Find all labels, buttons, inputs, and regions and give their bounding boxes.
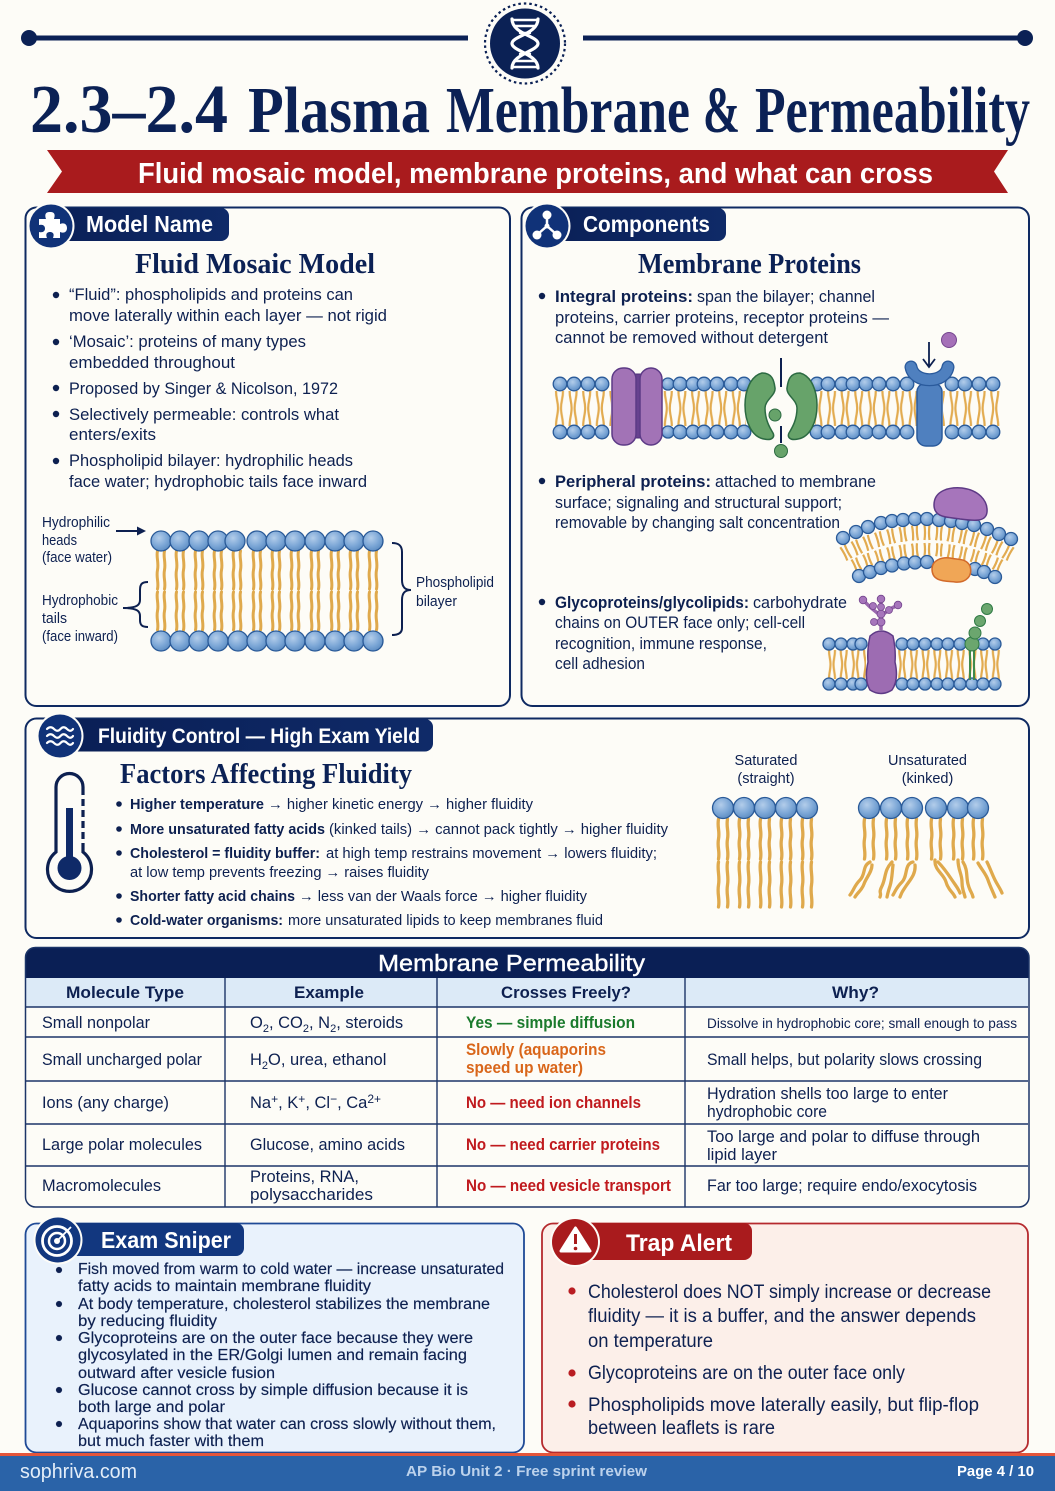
row: small uncharged polar: O, urea, ethanol [268, 1051, 386, 1069]
footer bar: AP Bio Unit 2 · Free sprint review [406, 1463, 647, 1480]
heading: Fluid Mosaic Model: Fluid Mosaic Model [135, 248, 375, 280]
row: ions: 2+ [367, 1092, 381, 1106]
panel: trap alert [542, 1217, 1028, 1452]
row: ions: , K [278, 1094, 298, 1112]
icon: warning triangle [550, 1217, 600, 1267]
bullet list: factors: at high temp restrains movement → lowers fluidity; [326, 846, 657, 862]
row: small nonpolar [42, 1014, 1017, 1035]
bullet list: trap points: fluidity — it is a buffer, and the answer depends [588, 1306, 976, 1327]
carrier protein [745, 358, 817, 458]
bullet list: factors: Cholesterol = fluidity buffer: [130, 846, 320, 862]
glycolipid [965, 604, 992, 680]
row: small nonpolar: 2 [303, 1023, 309, 1035]
bullet list: fluid mosaic facts: ‘Mosaic’: proteins of many types [69, 332, 306, 351]
label: phospholipid bilayer: Phospholipid [416, 575, 494, 591]
arrow: to heads [116, 526, 146, 536]
row: small uncharged polar: speed up water) [466, 1059, 583, 1077]
row: ions: Hydration shells too large to enter [707, 1085, 948, 1103]
row: macromolecules [42, 1168, 977, 1204]
bullet list: fluid mosaic facts: move laterally within each layer — not rigid [69, 306, 387, 325]
bullet list: fluid mosaic facts: Phospholipid bilayer: hydrophilic heads [69, 451, 353, 470]
row: ions [42, 1085, 948, 1121]
header rule with DNA emblem [21, 4, 1033, 84]
table: membrane permeability [25, 947, 1029, 1207]
text: glycoproteins and glycolipids: cell adhesion [555, 654, 645, 673]
diagram: phospholipid bilayer [42, 515, 494, 651]
row: large polar molecules: Glucose, amino acids [250, 1136, 405, 1154]
channel protein [612, 368, 662, 445]
title: Plasma [248, 74, 430, 147]
bullet list: exam sniper points: At body temperature, cholesterol stabilizes the membrane [78, 1296, 490, 1313]
table header row [26, 978, 1028, 1007]
diagram: unsaturated kinked tails: (kinked) [902, 771, 953, 787]
bullet list: factors: → higher kinetic energy → higher fluidity [268, 797, 534, 813]
icon: thermometer [48, 774, 91, 891]
peripheral protein: purple [934, 488, 987, 520]
panel: exam sniper [26, 1216, 524, 1452]
footer bar [0, 1453, 1055, 1491]
row: ions: hydrophobic core [707, 1103, 827, 1121]
tab: Trap Alert: Trap Alert [626, 1230, 732, 1257]
bullet list: exam sniper points: Glucose cannot cross by simple diffusion because it is [78, 1382, 468, 1399]
diagram: saturated tails: Saturated [735, 753, 797, 769]
row: small nonpolar: , CO [269, 1014, 303, 1032]
icon: network nodes [524, 202, 570, 250]
label: hydrophobic tails: Hydrophobic [42, 593, 118, 609]
label: hydrophobic tails: (face inward) [42, 629, 118, 645]
bullet list: fluid mosaic facts: embedded throughout [69, 353, 235, 372]
row: ions: + [298, 1092, 305, 1106]
row: small nonpolar: Dissolve in hydrophobic core; small enough to pass [707, 1015, 1017, 1031]
text: peripheral proteins: Peripheral proteins: [555, 472, 711, 491]
bullet list: fluid mosaic facts: “Fluid”: phospholipids and proteins can [69, 285, 353, 304]
label: hydrophobic tails [42, 593, 118, 645]
row: macromolecules: Far too large; require endo/exocytosis [707, 1177, 977, 1195]
row: large polar molecules: lipid layer [707, 1146, 778, 1164]
bullet list: trap points: Glycoproteins are on the outer face only [588, 1363, 905, 1384]
tab: Fluidity Control [50, 719, 433, 752]
label: hydrophilic heads: Hydrophilic [42, 515, 110, 531]
footer bar: Page 4 / 10 [957, 1463, 1034, 1480]
row: small uncharged polar: Small uncharged polar [42, 1051, 202, 1069]
table header row: Why? [832, 983, 879, 1002]
label: hydrophilic heads [42, 515, 112, 566]
text: integral proteins: span the bilayer; channel [697, 287, 875, 306]
bullet list: factors: (kinked tails) → cannot pack tightly → higher fluidity [329, 822, 669, 838]
row: small uncharged polar: Small helps, but polarity slows crossing [707, 1051, 982, 1069]
row: ions: Ions (any charge) [42, 1094, 169, 1112]
diagram: unsaturated kinked tails [850, 753, 1002, 897]
receptor protein [911, 332, 956, 446]
subtitle ribbon: Fluid mosaic model, membrane proteins, and what can cross [138, 158, 933, 190]
diagram: unsaturated kinked tails: Unsaturated [888, 753, 967, 769]
icon: DNA helix [512, 19, 538, 68]
row: small nonpolar: O [250, 1014, 263, 1032]
title: Membrane [446, 74, 690, 147]
text: glycoproteins and glycolipids: Glycoproteins/glycolipids: [555, 593, 749, 612]
row: macromolecules: No — need vesicle transport [466, 1177, 671, 1195]
text: peripheral proteins [539, 472, 876, 532]
row: small uncharged polar: Slowly (aquaporins [466, 1041, 606, 1059]
bullet list: exam sniper points: but much faster with them [78, 1433, 264, 1450]
bullet list: trap points: Phospholipids move laterally easily, but flip-flop [588, 1395, 979, 1416]
tab: Model Name: Model Name [86, 211, 213, 237]
label: hydrophobic tails: tails [42, 611, 67, 627]
bullet list: exam sniper points: Aquaporins show that water can cross slowly without them, [78, 1416, 496, 1433]
row: macromolecules: Proteins, RNA, [250, 1168, 359, 1186]
heading: Membrane Proteins: Membrane Proteins [638, 248, 861, 280]
bullet list: fluid mosaic facts: face water; hydrophobic tails face inward [69, 472, 367, 491]
bullet list: fluid mosaic facts: Proposed by Singer & Nicolson, 1972 [69, 379, 338, 398]
tab: Fluidity Control: Fluidity Control — High Exam Yield [98, 725, 420, 748]
bullet list: fluid mosaic facts: Selectively permeable: controls what [69, 405, 339, 424]
row: ions: − [330, 1092, 337, 1106]
bullet list: factors: Cold-water organisms: [130, 913, 283, 929]
label: phospholipid bilayer [416, 575, 494, 610]
bullet list: trap points [568, 1282, 991, 1439]
table title bar: Membrane Permeability [378, 950, 646, 976]
glycoprotein [859, 595, 902, 694]
bullet list: exam sniper points: Glycoproteins are on the outer face because they were [78, 1330, 473, 1347]
row: macromolecules: polysaccharides [250, 1186, 373, 1204]
peripheral protein: orange [932, 558, 971, 582]
brace: tails [123, 582, 148, 627]
icon: waves [36, 712, 84, 760]
text: integral proteins: proteins, carrier proteins, receptor proteins — [555, 308, 889, 327]
icon: target [34, 1216, 82, 1264]
bullet list: exam sniper points: by reducing fluidity [78, 1313, 217, 1330]
bullet list: exam sniper points: both large and polar [78, 1399, 226, 1416]
panel: fluidity control [26, 712, 1029, 938]
diagram: saturated tails [712, 753, 818, 907]
bullet list: factors: Higher temperature [130, 797, 264, 813]
diagram: saturated tails: (straight) [737, 771, 795, 787]
label: hydrophilic heads: (face water) [42, 550, 112, 566]
diagram: integral proteins in membrane [553, 332, 1000, 458]
table header row: Crosses Freely? [501, 983, 631, 1002]
text: peripheral proteins: removable by changing salt concentration [555, 513, 840, 532]
row: large polar molecules: No — need carrier proteins [466, 1136, 660, 1154]
panel: components [522, 202, 1029, 706]
brace: bilayer [392, 543, 411, 635]
row: small uncharged polar [42, 1041, 982, 1077]
title: & [703, 74, 740, 147]
row: small nonpolar: 2 [330, 1023, 336, 1035]
diagram: curved membrane with peripheral proteins [836, 488, 1018, 584]
text: peripheral proteins: attached to membrane [715, 472, 876, 491]
table header row: Molecule Type [66, 983, 184, 1002]
row: small nonpolar: Small nonpolar [42, 1014, 150, 1032]
panel: model name [26, 202, 510, 706]
text: glycoproteins and glycolipids: carbohydrate [753, 593, 847, 612]
bullet list: factors: More unsaturated fatty acids [130, 822, 325, 838]
tab: Trap Alert [570, 1223, 752, 1260]
tab: Model Name [36, 208, 229, 241]
diagram: glycoprotein and glycolipid [823, 595, 1001, 694]
bullet list: trap points: Cholesterol does NOT simply increase or decrease [588, 1282, 991, 1303]
tails [157, 551, 377, 630]
table title bar [25, 947, 1029, 978]
text: integral proteins: cannot be removed without detergent [555, 328, 828, 347]
bullet list: exam sniper points: outward after vesicle fusion [78, 1365, 275, 1382]
text: glycoproteins and glycolipids: chains on OUTER face only; cell-cell [555, 613, 805, 632]
row: small nonpolar: 2 [263, 1023, 269, 1035]
heading: Factors Affecting Fluidity: Factors Affecting Fluidity [120, 758, 412, 790]
tab: Components [532, 208, 726, 241]
bullet list: factors: at low temp prevents freezing → raises fluidity [130, 865, 430, 881]
row: ions: No — need ion channels [466, 1094, 641, 1112]
text: glycoproteins and glycolipids: recognition, immune response, [555, 634, 767, 653]
footer bar: sophriva.com [20, 1461, 137, 1483]
title: 2.3–2.4 [30, 71, 228, 147]
row: large polar molecules: Too large and polar to diffuse through [707, 1128, 980, 1146]
subtitle ribbon [47, 150, 1008, 193]
bullet list: exam sniper points: Fish moved from warm to cold water — increase unsaturated [78, 1261, 504, 1278]
bullet list: factors: → less van der Waals force → higher fluidity [299, 889, 588, 905]
bullet list: factors: Shorter fatty acid chains [130, 889, 295, 905]
tab: Exam Sniper [50, 1223, 244, 1256]
row: large polar molecules [42, 1128, 980, 1164]
text: integral proteins [539, 287, 889, 347]
row: small nonpolar: Yes — simple diffusion [466, 1014, 635, 1032]
row: small uncharged polar: 2 [262, 1060, 268, 1072]
table grid [26, 948, 1029, 1207]
row: large polar molecules: Large polar molecules [42, 1136, 202, 1154]
title [30, 71, 1030, 147]
bullet list: fluid mosaic facts: enters/exits [69, 425, 156, 444]
bullet list: trap points: on temperature [588, 1331, 713, 1352]
row: small uncharged polar: H [250, 1051, 262, 1069]
bullet list: exam sniper points: fatty acids to maintain membrane fluidity [78, 1278, 371, 1295]
text: glycoproteins and glycolipids [539, 593, 847, 673]
tab: Components: Components [583, 211, 710, 237]
icon: puzzle piece [28, 202, 74, 250]
label: hydrophilic heads: heads [42, 533, 77, 549]
bullet list: fluid mosaic facts [53, 285, 387, 491]
row: small nonpolar: , N [309, 1014, 330, 1032]
text: peripheral proteins: surface; signaling and structural support; [555, 493, 842, 512]
tab: Exam Sniper: Exam Sniper [101, 1227, 231, 1253]
row: ions: , Cl [305, 1094, 330, 1112]
text: integral proteins: Integral proteins: [555, 287, 693, 306]
bullet list: trap points: between leaflets is rare [588, 1418, 775, 1439]
table header row: Example [294, 983, 364, 1002]
bullet list: factors: more unsaturated lipids to keep membranes fluid [288, 913, 603, 929]
label: phospholipid bilayer: bilayer [416, 594, 457, 610]
row: ions: , Ca [337, 1094, 368, 1112]
row: ions: Na [250, 1094, 271, 1112]
bullet list: exam sniper points: glycosylated in the ER/Golgi lumen and remain facing [78, 1347, 467, 1364]
row: ions: + [271, 1092, 278, 1106]
bullet list: factors [116, 797, 669, 929]
bullet list: exam sniper points [56, 1261, 504, 1450]
heads [151, 531, 383, 651]
row: small nonpolar: , steroids [336, 1014, 403, 1032]
row: macromolecules: Macromolecules [42, 1177, 161, 1195]
